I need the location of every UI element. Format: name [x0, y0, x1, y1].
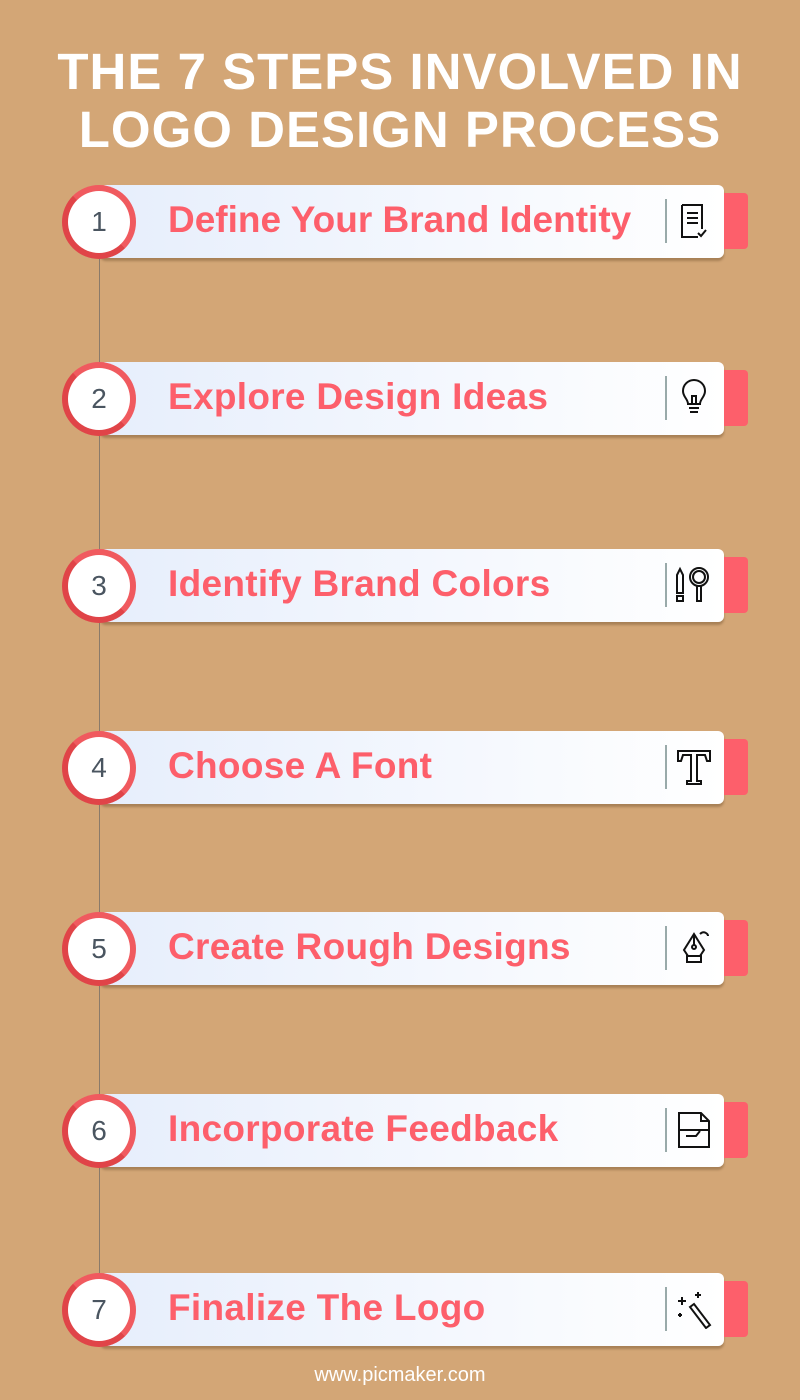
- label 7: Finalize The Logo: [168, 1287, 486, 1328]
- label 2: Explore Design Ideas: [168, 376, 548, 417]
- step 6: [62, 1094, 748, 1171]
- number 4: [62, 731, 136, 805]
- icon: bulb: [682, 379, 706, 413]
- number 1: 1: [91, 206, 107, 237]
- number 7: [62, 1273, 136, 1347]
- title: [57, 43, 743, 158]
- number 3: 3: [91, 570, 107, 601]
- icon: pencil and magnifier: [676, 566, 709, 602]
- step 3: [62, 549, 748, 626]
- step 7: [62, 1273, 748, 1350]
- label 6: Incorporate Feedback: [168, 1108, 559, 1149]
- number 7: 7: [91, 1294, 107, 1325]
- step 2: [62, 362, 748, 439]
- step 1: [62, 185, 748, 262]
- number 6: 6: [91, 1115, 107, 1146]
- label 5: Create Rough Designs: [168, 926, 571, 967]
- step 4: [62, 731, 748, 808]
- number 3: [62, 549, 136, 623]
- label 3: Identify Brand Colors: [168, 563, 550, 604]
- label 4: Choose A Font: [168, 745, 432, 786]
- icon: document check: [681, 204, 707, 238]
- step 5: [62, 912, 748, 989]
- number 2: 2: [91, 383, 107, 414]
- number 5: 5: [91, 933, 107, 964]
- number 6: [62, 1094, 136, 1168]
- icon: T: [677, 750, 711, 785]
- number 1: [62, 185, 136, 259]
- icon: magic wand: [678, 1292, 712, 1329]
- footer url: www.picmaker.com: [314, 1364, 486, 1386]
- icon: file: [678, 1112, 710, 1148]
- title: THE 7 STEPS INVOLVED IN: [57, 43, 743, 100]
- icon: pen nib: [682, 931, 709, 963]
- number 2: [62, 362, 136, 436]
- number 4: 4: [91, 752, 107, 783]
- number 5: [62, 912, 136, 986]
- title: LOGO DESIGN PROCESS: [79, 101, 721, 158]
- label 1: Define Your Brand Identity: [168, 199, 631, 240]
